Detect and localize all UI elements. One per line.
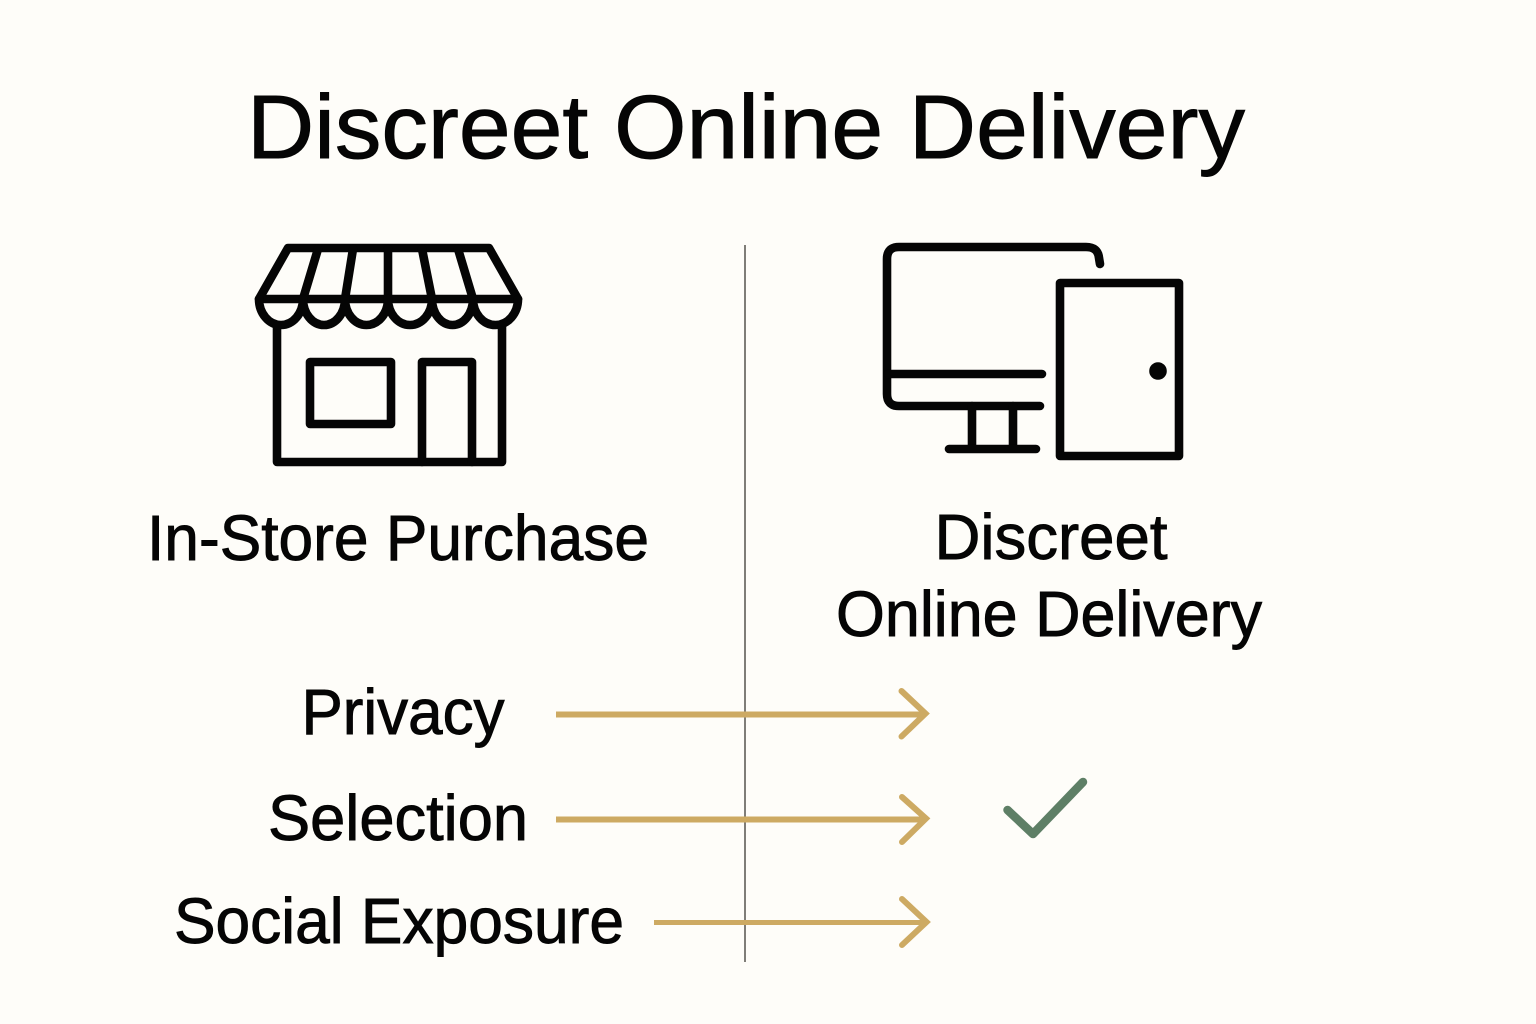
arrow: social exposure bbox=[654, 899, 926, 945]
right heading bbox=[836, 501, 1262, 650]
icon: store bbox=[259, 248, 518, 462]
icon: computer and door bbox=[887, 247, 1179, 456]
left heading: In-Store Purchase bbox=[147, 502, 649, 574]
label: social exposure: Social Exposure bbox=[174, 885, 624, 957]
right heading: Discreet bbox=[934, 501, 1168, 573]
arrow: selection bbox=[556, 797, 926, 842]
arrow: privacy bbox=[556, 691, 926, 736]
right heading: Online Delivery bbox=[836, 578, 1262, 650]
title: Discreet Online Delivery bbox=[247, 78, 1245, 178]
label: selection: Selection bbox=[268, 782, 528, 854]
label: privacy: Privacy bbox=[302, 676, 504, 748]
icon: check mark bbox=[1008, 782, 1083, 834]
